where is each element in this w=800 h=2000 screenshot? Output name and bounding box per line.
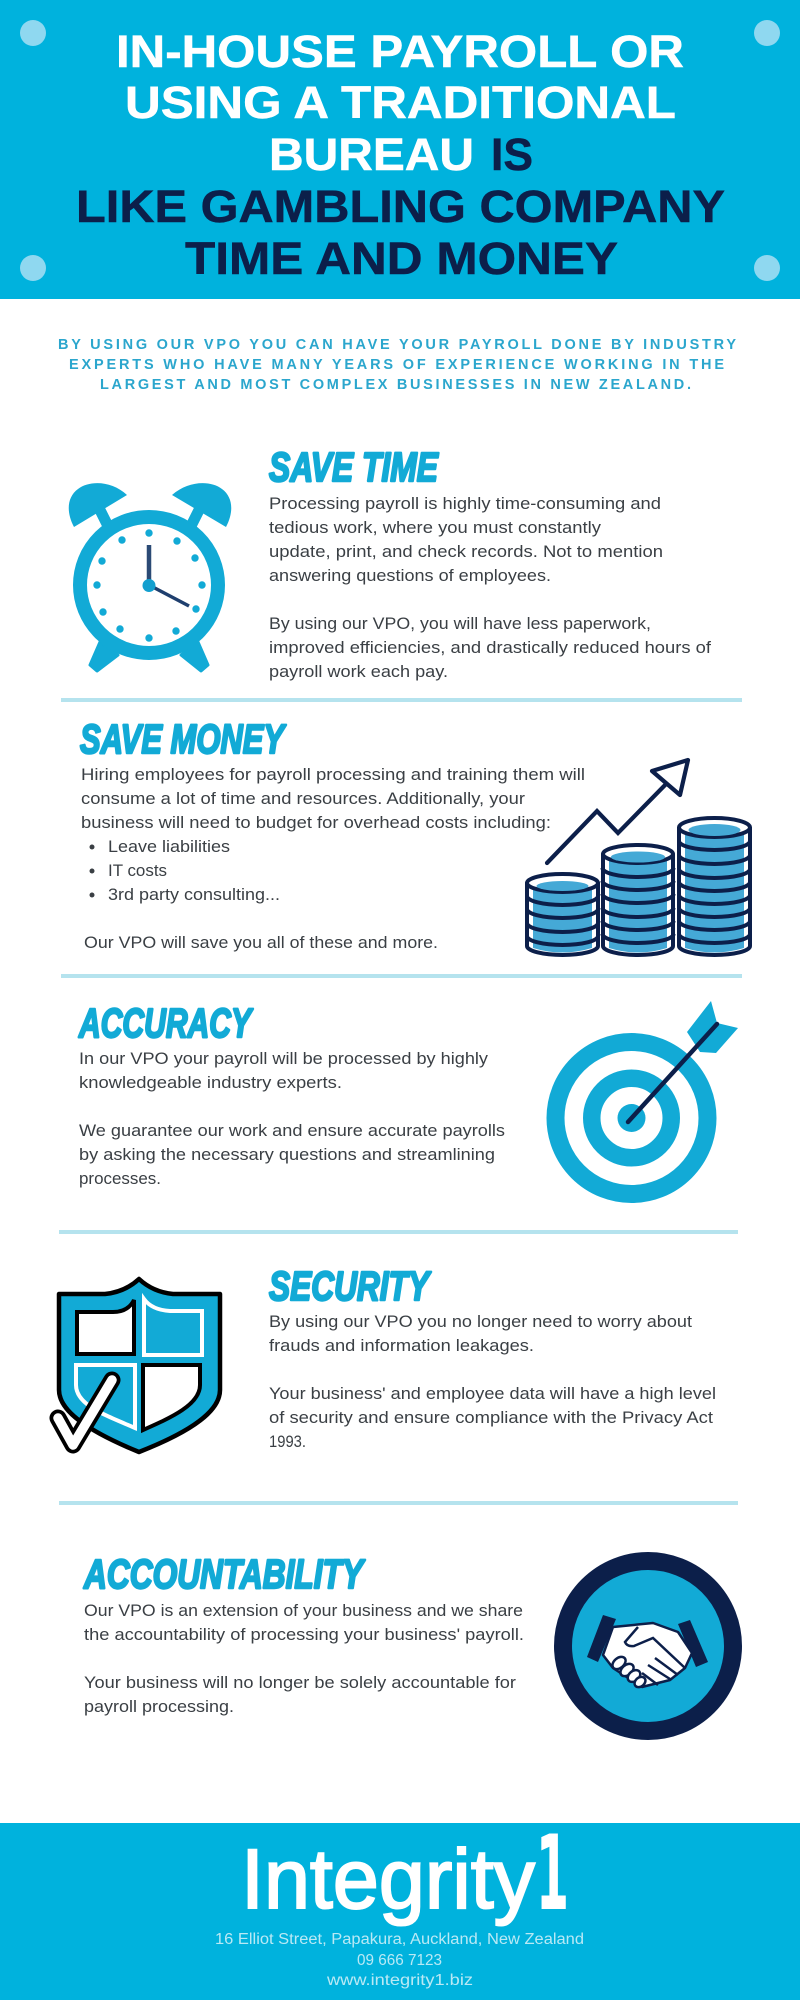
text: accuracy: knowledgeable industry experts. [79, 1074, 342, 1092]
text: save time: tedious work, where you must constantly [269, 519, 602, 537]
footer contact details: www.integrity1.biz [326, 1972, 473, 1989]
text: save time: answering questions of employees. [269, 567, 551, 585]
title: IS [491, 129, 533, 180]
title: USING A TRADITIONAL [125, 77, 676, 128]
text: save money: 3rd party consulting... [108, 886, 280, 904]
text: save money: Hiring employees for payroll processing and training them will [81, 766, 585, 784]
text: accuracy: processes. [79, 1170, 161, 1188]
header banner [0, 0, 800, 299]
text: accuracy: In our VPO your payroll will be processed by highly [79, 1050, 489, 1068]
text: security: Your business' and employee data will have a high level [269, 1385, 716, 1403]
text: save time: By using our VPO, you will have less paperwork, [269, 615, 651, 633]
icon: coin stacks with rising arrow [527, 760, 750, 955]
text: save money: business will need to budget for overhead costs including: [81, 814, 551, 832]
intro statement: BY USING OUR VPO YOU CAN HAVE YOUR PAYROLL DONE BY INDUSTRY [58, 337, 736, 353]
text: save money: Our VPO will save you all of these and more. [84, 934, 438, 952]
heading: security: SECURITY [269, 1263, 432, 1309]
title: TIME AND MONEY [185, 233, 618, 284]
intro statement [58, 337, 736, 393]
text: save time: Processing payroll is highly time-consuming and [269, 495, 661, 513]
text: save time [269, 495, 711, 681]
heading: save time: SAVE TIME [269, 444, 439, 490]
footer contact details [215, 1931, 584, 1989]
title: IN-HOUSE PAYROLL OR [116, 26, 684, 77]
icon: handshake in circle [563, 1561, 733, 1731]
text: save time: improved efficiencies, and drastically reduced hours of [269, 639, 711, 657]
text: security: 1993. [269, 1433, 306, 1451]
text: save money: IT costs [108, 862, 167, 880]
heading: accuracy: ACCURACY [78, 1000, 254, 1046]
intro statement: EXPERTS WHO HAVE MANY YEARS OF EXPERIENCE WORKING IN THE [69, 357, 724, 373]
text: security: By using our VPO you no longer need to worry about [269, 1313, 692, 1331]
heading: accountability: ACCOUNTABILITY [83, 1551, 366, 1597]
text: accountability [84, 1602, 524, 1716]
text: save time: update, print, and check records. Not to mention [269, 543, 663, 561]
icon: alarm clock [69, 483, 231, 671]
text: accountability: Our VPO is an extension of your business and we share [84, 1602, 523, 1620]
text: security: frauds and information leakages. [269, 1337, 534, 1355]
text: accuracy: by asking the necessary questions and streamlining [79, 1146, 495, 1164]
title: LIKE GAMBLING COMPANY [76, 181, 725, 232]
text: save money: consume a lot of time and resources. Additionally, your [81, 790, 526, 808]
heading: save money: SAVE MONEY [80, 716, 287, 762]
icon: target with arrow [556, 1001, 738, 1194]
text: save money: Leave liabilities [108, 838, 230, 856]
icon: shield with check mark [58, 1279, 220, 1452]
text: accountability: Your business will no longer be solely accountable for [84, 1674, 517, 1692]
footer contact details: 16 Elliot Street, Papakura, Auckland, New Zealand [215, 1931, 584, 1948]
title [76, 26, 725, 284]
text: save time: payroll work each pay. [269, 663, 448, 681]
title: BUREAU [269, 129, 474, 180]
text: accuracy [79, 1050, 505, 1188]
text: 1 [536, 1814, 569, 1934]
text: accountability: payroll processing. [84, 1698, 234, 1716]
text: save money [81, 766, 585, 952]
footer band [0, 1823, 800, 2000]
footer contact details: 09 666 7123 [357, 1952, 442, 1969]
logo: Integrity1: Integrity [241, 1832, 535, 1926]
text: accuracy: We guarantee our work and ensure accurate payrolls [79, 1122, 505, 1140]
text: security [269, 1313, 716, 1451]
text: accountability: the accountability of processing your business' payroll. [84, 1626, 524, 1644]
intro statement: LARGEST AND MOST COMPLEX BUSINESSES IN NEW ZEALAND. [100, 377, 691, 393]
text: security: of security and ensure compliance with the Privacy Act [269, 1409, 713, 1427]
